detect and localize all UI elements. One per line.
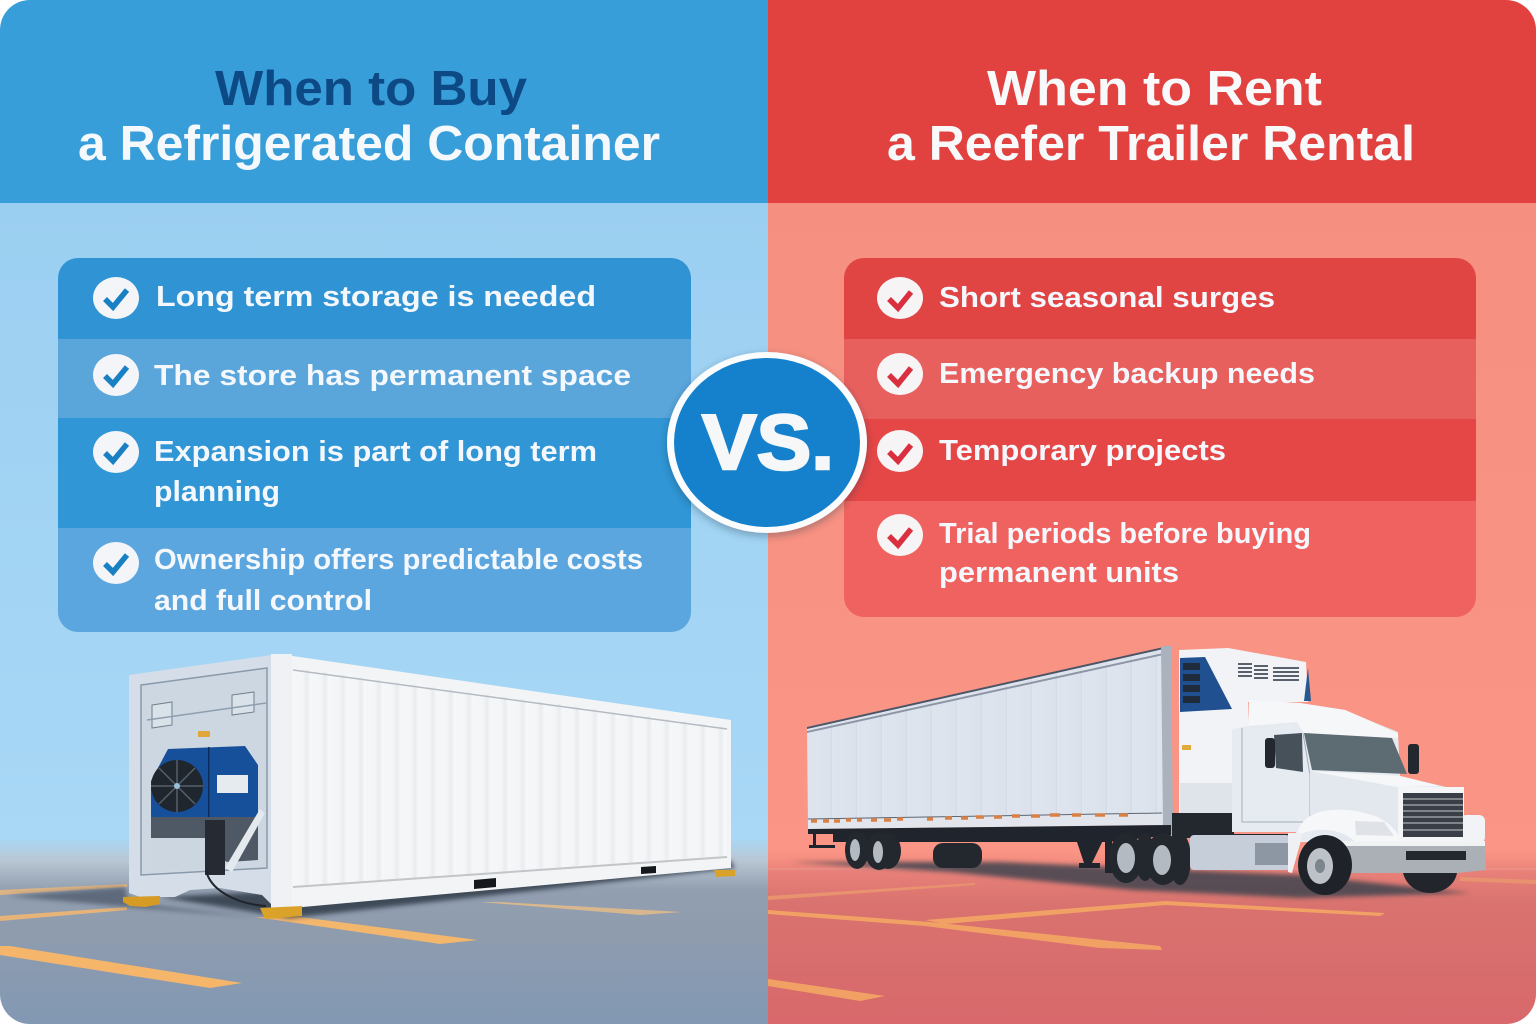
item: emergency backup: Emergency backup needs — [939, 358, 1315, 390]
windows — [1304, 733, 1407, 774]
fuel tank — [1190, 835, 1290, 870]
corner feet — [123, 896, 160, 907]
badge: VS. — [667, 352, 867, 533]
fan — [151, 760, 203, 812]
item: predictable costs — [93, 542, 643, 617]
headlight — [1355, 821, 1394, 836]
heading: when to buy: a Refrigerated Container — [78, 117, 660, 171]
badge: VS.: VS. — [702, 398, 834, 486]
item: emergency backup — [877, 353, 1315, 395]
front bumper — [1337, 841, 1486, 873]
item: trial periods — [877, 514, 1311, 589]
header band: buy — [0, 0, 768, 203]
item: long term storage — [93, 277, 596, 319]
container long side — [279, 654, 731, 908]
landing gear — [1077, 842, 1102, 868]
trailer underside — [808, 825, 1171, 842]
item: seasonal surges: Short seasonal surges — [939, 282, 1275, 314]
reefer unit — [1179, 648, 1311, 815]
item: permanent space: The store has permanent space — [154, 360, 631, 392]
item: expansion planning: Expansion is part of long term — [154, 436, 597, 468]
refrigeration unit — [151, 746, 258, 817]
item: predictable costs: Ownership offers predictable costs — [154, 544, 643, 576]
heading: when to buy — [78, 62, 660, 171]
heading: when to rent: a Reefer Trailer Rental — [887, 117, 1415, 171]
header band: rent — [768, 0, 1536, 203]
trailer box — [807, 647, 1171, 829]
list panel: reasons to buy — [58, 258, 691, 632]
trailer marker lights — [811, 815, 1128, 821]
heading: when to rent — [888, 70, 1412, 160]
panel: buy side — [0, 0, 768, 1024]
cab body backing — [1232, 702, 1446, 842]
item: expansion planning — [93, 431, 597, 508]
heading: when to buy: When to Buy — [215, 62, 527, 116]
trailer wheels — [845, 831, 1191, 885]
front wheels — [1298, 835, 1457, 895]
hood — [1310, 772, 1446, 816]
fender — [1297, 810, 1400, 842]
item: permanent space — [93, 354, 631, 396]
item: trial periods: permanent units — [939, 557, 1179, 589]
radiator grille — [1398, 787, 1464, 841]
item: temporary projects: Temporary projects — [939, 435, 1226, 467]
item: trial periods: Trial periods before buying — [939, 518, 1311, 550]
cab chassis — [1172, 813, 1296, 838]
ground: red side parking lot — [768, 850, 1536, 1024]
item: seasonal surges — [877, 277, 1275, 319]
ground: blue side parking lot — [0, 838, 768, 1024]
list panel: reasons to rent — [844, 258, 1476, 617]
item: expansion planning: planning — [154, 476, 280, 508]
cab roof fairing — [1248, 700, 1398, 738]
heading: when to rent: When to Rent — [987, 62, 1322, 116]
container front face — [129, 655, 272, 905]
panel: rent side — [768, 0, 1536, 1024]
item: predictable costs: and full control — [154, 585, 372, 617]
illustration: reefer truck — [790, 646, 1486, 898]
item: long term storage: Long term storage is needed — [156, 281, 596, 313]
illustration: refrigerated container — [8, 654, 735, 919]
item: temporary projects — [877, 430, 1226, 472]
